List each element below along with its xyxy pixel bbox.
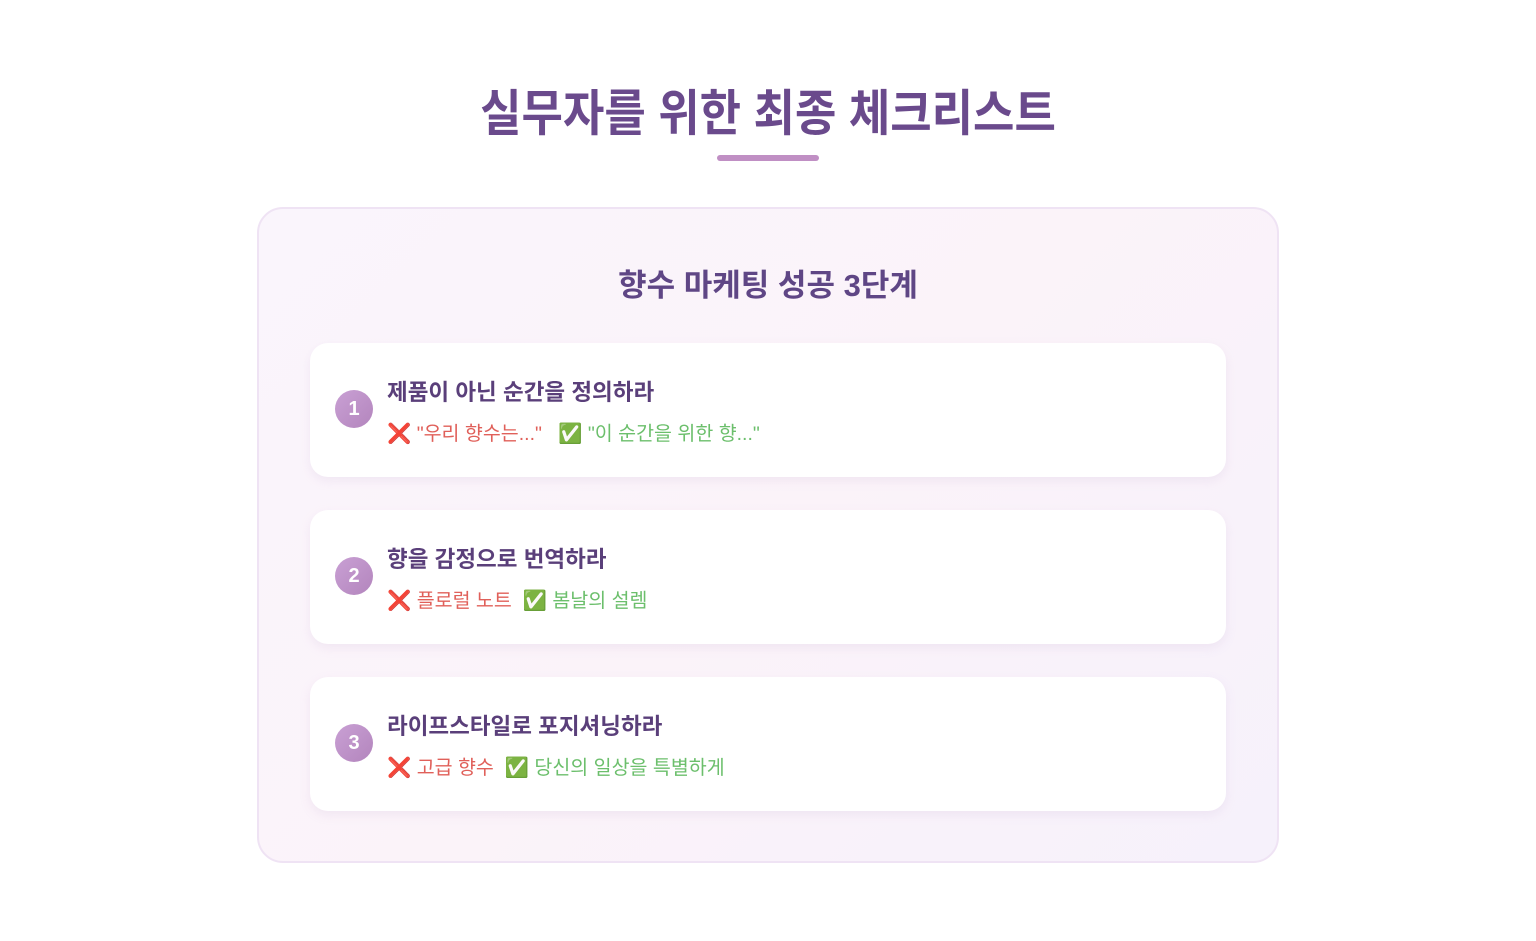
badge 2	[335, 557, 373, 595]
badge 1: 1	[348, 398, 360, 420]
item 3 heading: 라이프스타일로 포지셔닝하라	[387, 714, 662, 739]
title underline	[717, 155, 819, 161]
item 1 heading: 제품이 아닌 순간을 정의하라	[387, 380, 654, 405]
item 1 examples: ❌ "우리 향수는..." ✅ "이 순간을 위한 향..."	[387, 423, 760, 445]
item 2	[310, 510, 1226, 644]
subtitle: 향수 마케팅 성공 3단계	[618, 268, 918, 303]
badge 3: 3	[348, 732, 360, 754]
title: 실무자를 위한 최종 체크리스트	[480, 85, 1056, 142]
badge 3	[335, 724, 373, 762]
item 3	[310, 677, 1226, 811]
badge 1	[335, 390, 373, 428]
badge 2: 2	[348, 565, 360, 587]
item 1	[310, 343, 1226, 477]
item 2 heading: 향을 감정으로 번역하라	[387, 547, 607, 572]
item 2 examples: ❌ 플로럴 노트 ✅ 봄날의 설렘	[387, 590, 648, 612]
item 3 examples: ❌ 고급 향수 ✅ 당신의 일상을 특별하게	[387, 757, 725, 779]
panel: checklist card	[257, 207, 1279, 863]
